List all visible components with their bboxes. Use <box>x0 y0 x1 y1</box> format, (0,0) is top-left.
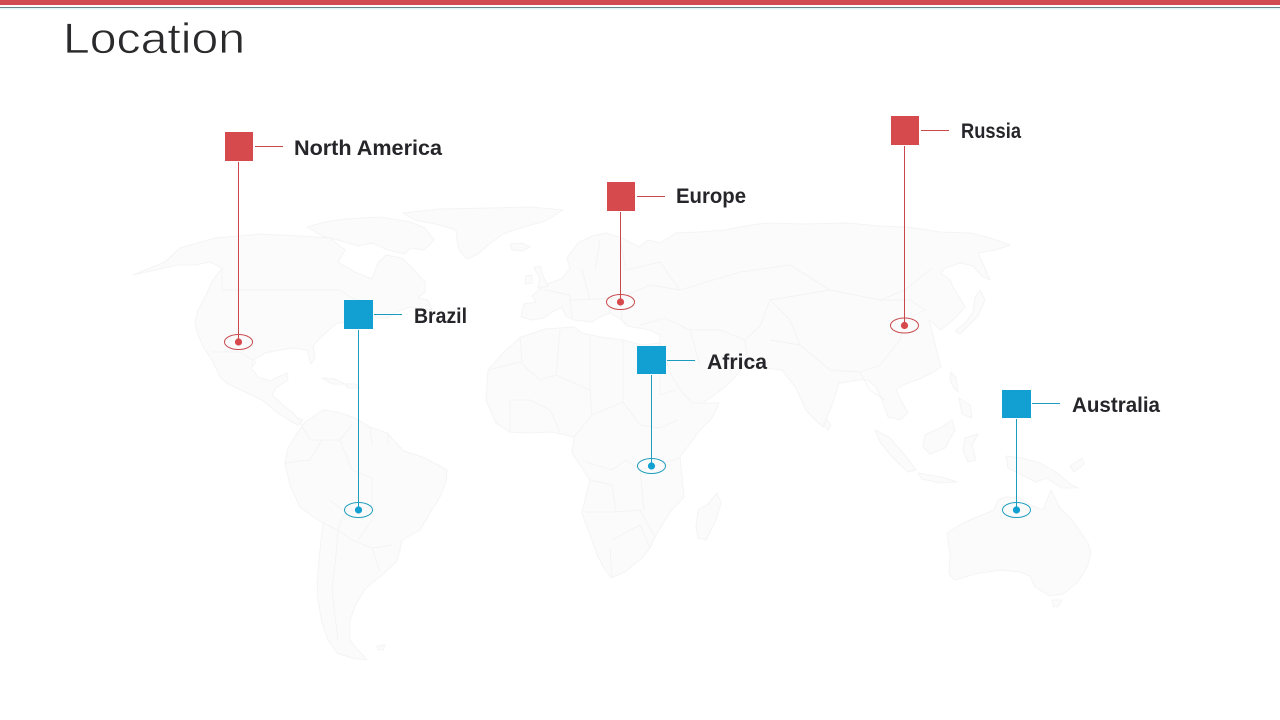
map: Falklands <box>377 645 385 650</box>
top accent bar <box>0 0 1280 10</box>
map: Greenland <box>403 207 563 259</box>
map: Caribbean <box>322 378 360 388</box>
map: South America <box>285 410 447 660</box>
pin: North America <box>224 132 283 350</box>
label: Europe: Europe <box>676 185 746 208</box>
map: New Guinea east <box>1070 458 1084 472</box>
map: Sumatra <box>875 430 916 472</box>
map: Sulawesi <box>963 434 978 462</box>
world map <box>133 207 1091 660</box>
pin: Africa <box>637 346 695 474</box>
map: Britain and Ireland <box>525 266 548 288</box>
map: Madagascar <box>696 493 721 540</box>
map: Africa <box>486 327 719 578</box>
map: Sri Lanka <box>824 419 831 430</box>
label: Australia: Australia <box>1072 394 1160 417</box>
map: Arctic islands <box>307 217 434 254</box>
pin: Australia <box>1002 390 1060 518</box>
map: Tasmania <box>1052 600 1062 607</box>
map: New Guinea <box>1006 456 1078 488</box>
map: Australia <box>947 490 1091 596</box>
map: Eurasia <box>521 223 1010 427</box>
pin: Europe <box>606 182 665 310</box>
map: North America <box>133 234 432 425</box>
pin: Brazil <box>344 300 402 518</box>
title: Location <box>63 15 245 63</box>
label: North America: North America <box>294 137 442 160</box>
pin: Russia <box>890 116 949 333</box>
map: Iceland <box>510 243 530 251</box>
map: Borneo <box>923 420 955 454</box>
map: Japan <box>955 290 985 334</box>
label: Brazil: Brazil <box>414 305 467 328</box>
label: Africa: Africa <box>707 351 767 374</box>
map: country borders <box>212 238 932 640</box>
map: Java <box>918 473 957 483</box>
map: Philippines <box>950 372 972 418</box>
label: Russia: Russia <box>961 120 1021 143</box>
